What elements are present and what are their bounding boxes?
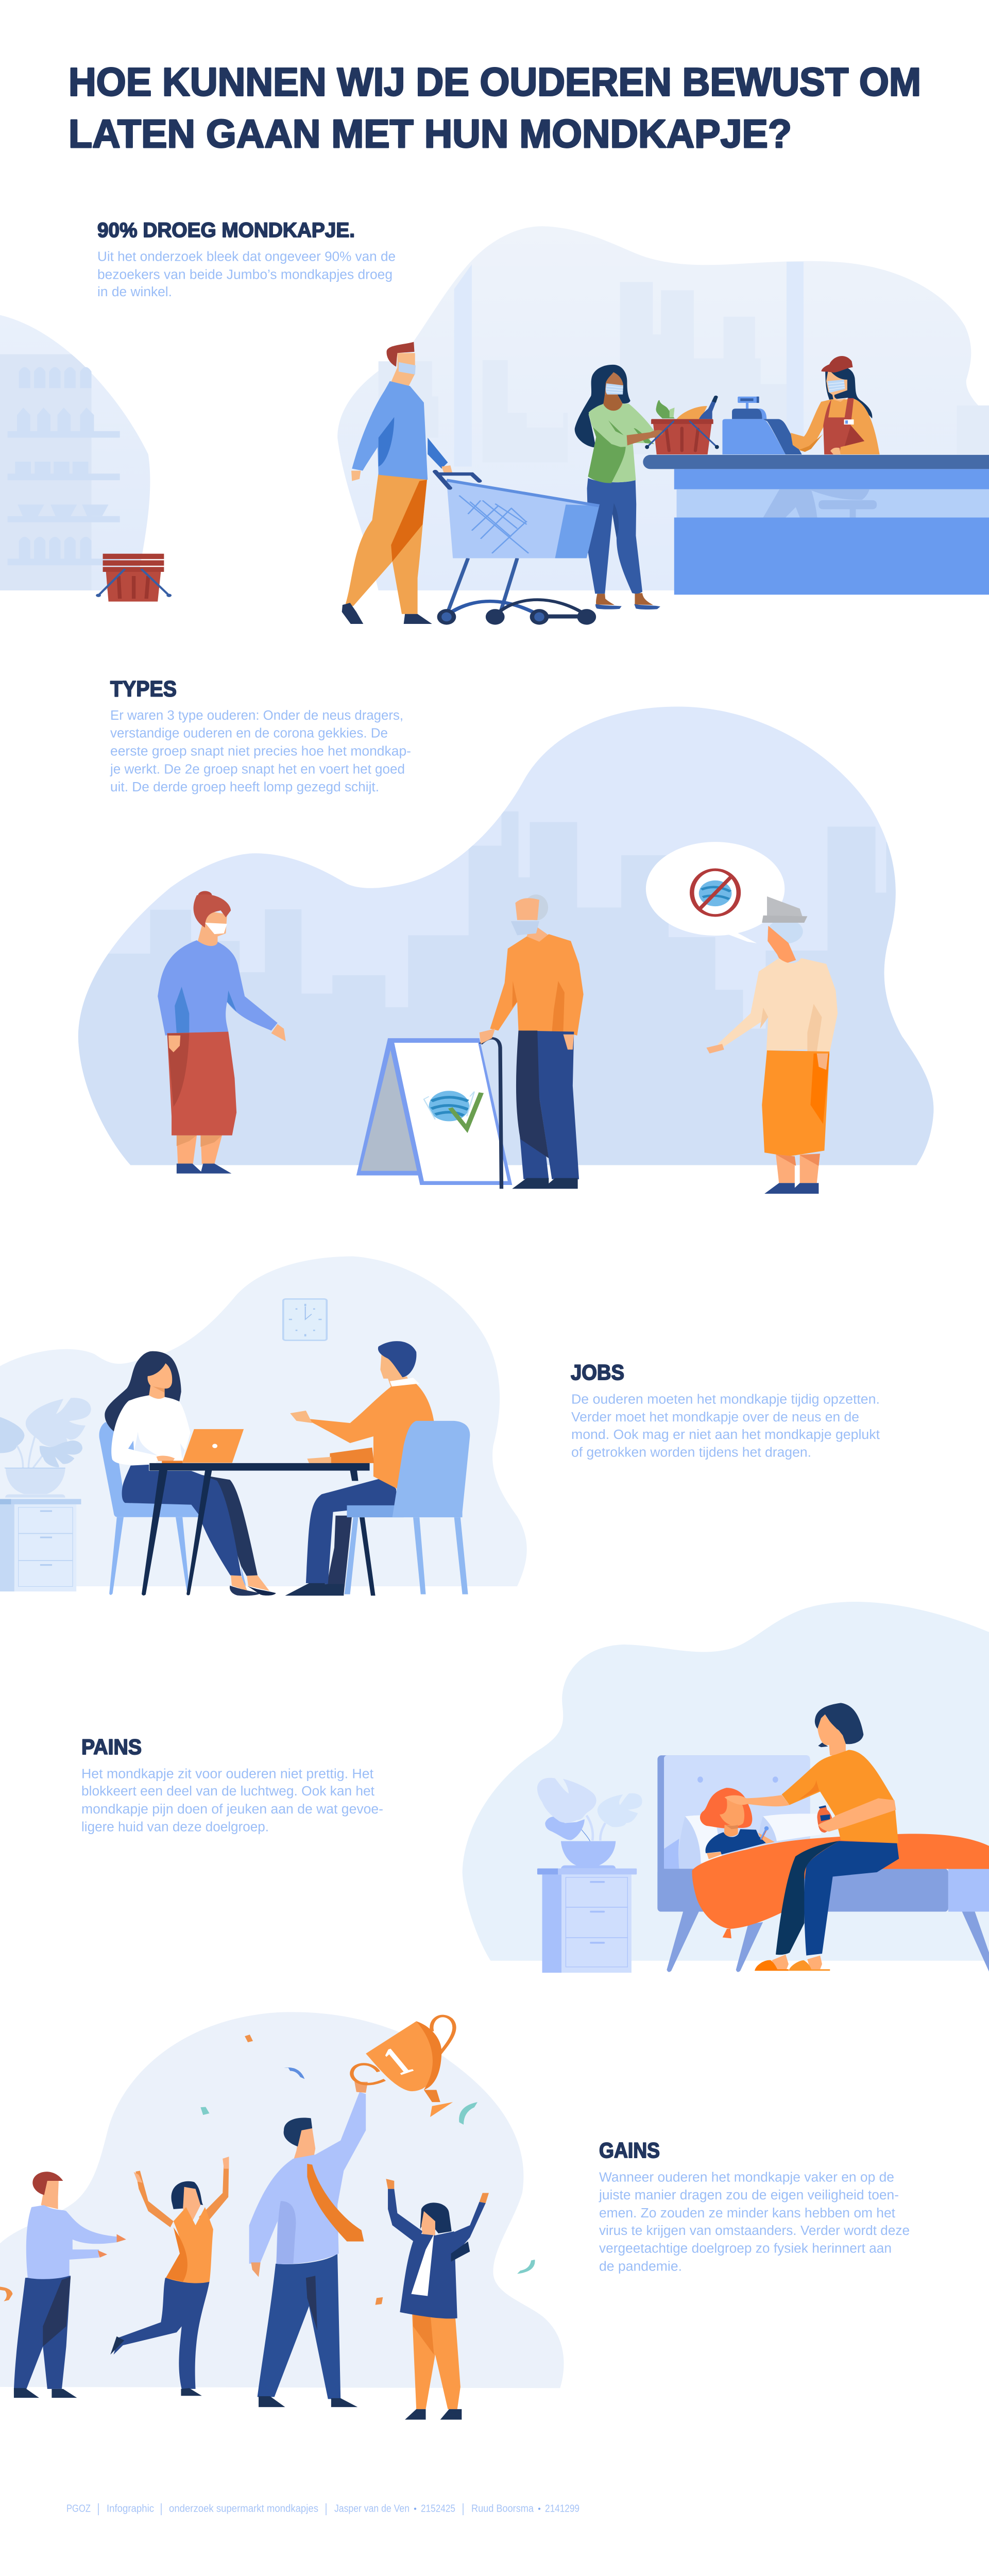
person: tall man raising trophy [249,2082,368,2407]
table legs [142,1470,212,1596]
text block: 90% droeg mondkapje: in de winkel. [97,284,172,299]
text block: types: uit. De derde groep heeft lomp gezegd schijt. [110,779,379,794]
shopping basket with groceries [651,396,718,454]
text block: types: eerste groep snapt niet precies hoe het mondkap- [110,743,411,758]
text block: pains: ligere huid van deze doelgroep. [81,1819,269,1835]
text block: pains: PAINS [81,1735,142,1759]
text block: gains: de pandemie. [599,2259,682,2274]
blanket [692,1834,989,1938]
text block: types: je werkt. De 2e groep snapt het en voert het goed [110,761,405,776]
confetti [0,2035,535,2305]
blob background [0,2012,564,2388]
person: grandma with hat [706,896,838,1194]
speech bubble [646,842,785,943]
text block: jobs: mond. Ook mag er niet aan het mondkapje geplukt [571,1427,880,1442]
sign with mask and check mark [356,1038,512,1185]
text block: gains: Wanneer ouderen het mondkapje vaker en op de [599,2170,894,2184]
text block: jobs: Verder moet het mondkapje over de neus en de [571,1409,859,1425]
text block: types [110,677,411,794]
blob background [0,1256,527,1586]
footer credits: 2152425 [421,2503,455,2514]
wall clock [283,1299,327,1341]
person: customer woman [575,365,663,609]
text block: 90% droeg mondkapje: Uit het onderzoek bleek dat ongeveer 90% van de [97,249,396,264]
illustration: team celebrating with trophy [0,2012,564,2419]
text block: types: TYPES [110,677,177,701]
plant [0,1398,91,1498]
person: mother [725,1703,899,1971]
person: man with mask [342,342,453,624]
text block: jobs: JOBS [571,1361,624,1384]
chair right [345,1421,470,1594]
cash register [722,397,802,454]
footer credits: Ruud Boorsma [471,2503,534,2514]
text block: gains [599,2139,910,2274]
text block: pains [81,1735,383,1835]
text block: gains: virus te krijgen van omstaanders. Verder wordt deze [599,2223,910,2238]
text block: jobs: De ouderen moeten het mondkapje tijdig opzetten. [571,1392,880,1406]
person: woman in navy jacket [386,2179,489,2419]
person: woman with laptop [105,1351,276,1596]
footer credits: Jasper van de Ven [334,2503,410,2514]
blob background [78,706,933,1165]
text block: types: verstandige ouderen en de corona gekkies. De [110,725,388,741]
text block: types: Er waren 3 type ouderen: Onder de neus dragers, [110,707,403,723]
person: woman in red skirt [158,891,286,1174]
person: woman in orange blouse [110,2157,229,2396]
cabinet [0,1499,81,1591]
blob background right [337,226,989,590]
text block: pains: mondkapje pijn doen of jeuken aan de wat gevoe- [81,1801,383,1817]
footer credits: onderzoek supermarkt mondkapjes [169,2503,318,2514]
bed [657,1755,989,1972]
text block: jobs [571,1361,880,1460]
plant [537,1778,642,1869]
skyline [379,262,989,467]
illustration: supermarket checkout [0,226,989,625]
person: old man with cane [480,894,584,1189]
illustration: mother caring for sick child [463,1602,989,1973]
person: man in orange sweater [285,1341,435,1596]
text block: gains: juiste manier dragen zou de eigen veiligheid toen- [599,2188,899,2202]
text block: pains: Het mondkapje zit voor ouderen niet prettig. Het [81,1766,374,1781]
footer credits: PGOZ [66,2503,91,2514]
laptop [162,1429,244,1463]
illustration: meeting at a table [0,1256,527,1596]
illustration: elderly people and mask sign [63,706,946,1194]
text block: pains: blokkeert een deel van de luchtweg. Ook kan het [81,1784,375,1799]
counter [643,455,989,595]
text block: gains: vergeetachtige doelgroep zo fysiek herinnert aan [599,2241,892,2256]
trophy: 1 [373,2039,422,2084]
cabinet [537,1869,637,1973]
text block: 90% droeg mondkapje: 90% DROEG MONDKAPJE. [97,218,355,242]
title [69,60,921,156]
text block: 90% droeg mondkapje: bezoekers van beide Jumbo’s mondkapjes droeg [97,267,393,282]
skyline [63,811,946,1165]
chair left [99,1422,246,1595]
footer credits: 2141299 [545,2503,579,2514]
title: HOE KUNNEN WIJ DE OUDEREN BEWUST OM [69,60,921,104]
footer credits [66,2503,579,2515]
person: man in light sweater [14,2172,126,2398]
stacked baskets [96,554,172,602]
text block: gains: GAINS [599,2139,660,2162]
footer credits: Infographic [107,2503,154,2514]
shopping trolley [435,471,599,625]
shelf blob left [0,315,150,590]
text block: gains: emen. Zo zouden ze minder kans hebben om het [599,2205,896,2221]
trophy [352,2016,454,2117]
blob background [463,1602,989,1961]
basket handles [645,421,719,449]
title: LATEN GAAN MET HUN MONDKAPJE? [69,111,792,156]
text block: jobs: of getrokken worden tijdens het dragen. [571,1445,811,1460]
table [149,1463,376,1596]
child in bed [700,1788,775,1859]
person: cashier [791,356,880,454]
text block: 90% droeg mondkapje [97,218,396,299]
